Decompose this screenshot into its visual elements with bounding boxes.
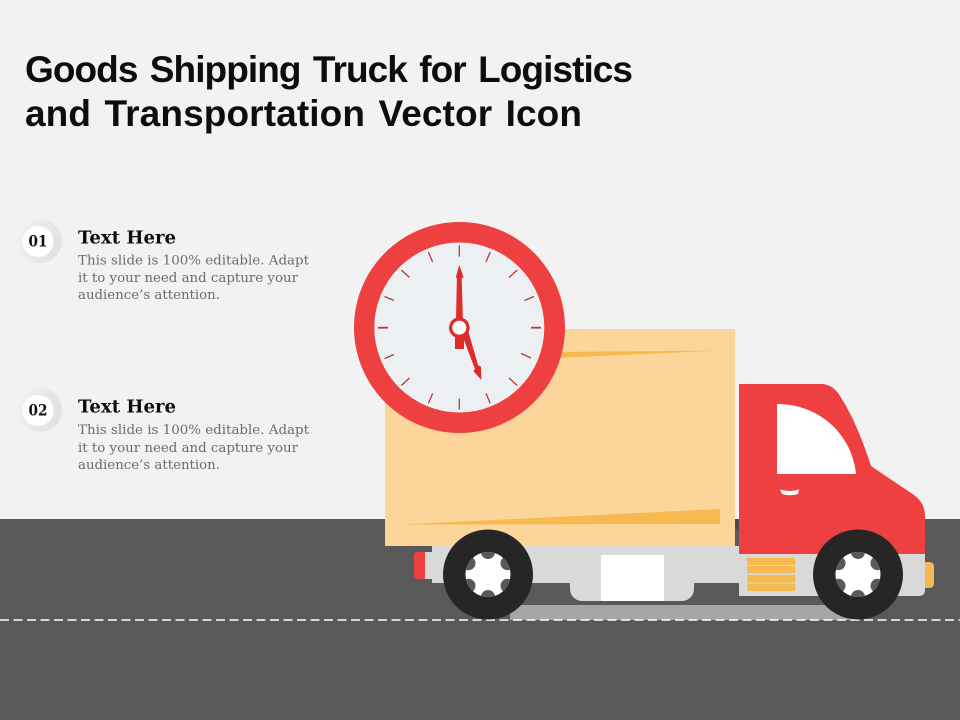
body text 01: audience’s attention. — [78, 288, 220, 303]
body text 01 — [78, 254, 310, 303]
headlight — [925, 562, 934, 588]
chassis — [425, 546, 742, 601]
cab — [739, 384, 925, 554]
title: and Transportation Vector Icon — [25, 93, 582, 134]
door handle — [780, 490, 799, 495]
cab window — [777, 404, 856, 474]
heading 01: Text Here — [78, 228, 176, 248]
title: Goods Shipping Truck for Logistics — [25, 49, 633, 90]
list item 02 — [18, 388, 310, 473]
body text 01: This slide is 100% editable. Adapt — [78, 254, 310, 268]
badge 01: 01 — [28, 232, 48, 250]
clock centre pin — [449, 317, 470, 338]
white step panel — [601, 555, 664, 601]
badge 02: 02 — [28, 400, 48, 420]
rear wheel — [443, 530, 533, 620]
road — [0, 519, 960, 720]
body text 02: audience’s attention. — [78, 458, 220, 473]
body text 02: This slide is 100% editable. Adapt — [78, 423, 310, 438]
truck — [385, 329, 934, 620]
body text 01: it to your need and capture your — [78, 271, 299, 286]
cargo box — [385, 329, 735, 546]
body text 02: it to your need and capture your — [78, 441, 299, 456]
dashed road line — [0, 619, 960, 621]
badge 01 — [18, 219, 62, 263]
front lower bumper — [739, 550, 925, 596]
heading 02: Text Here — [78, 398, 176, 418]
badge 02 — [18, 388, 62, 432]
front wheel — [813, 530, 903, 620]
title — [25, 49, 633, 134]
clock — [354, 222, 565, 433]
rear bumper light — [414, 552, 428, 579]
grille — [747, 558, 795, 591]
truck shadow on road — [510, 605, 855, 620]
clock hands — [455, 265, 481, 380]
list item 01 — [18, 219, 310, 303]
cab connector — [735, 519, 739, 529]
body text 02 — [78, 423, 310, 473]
